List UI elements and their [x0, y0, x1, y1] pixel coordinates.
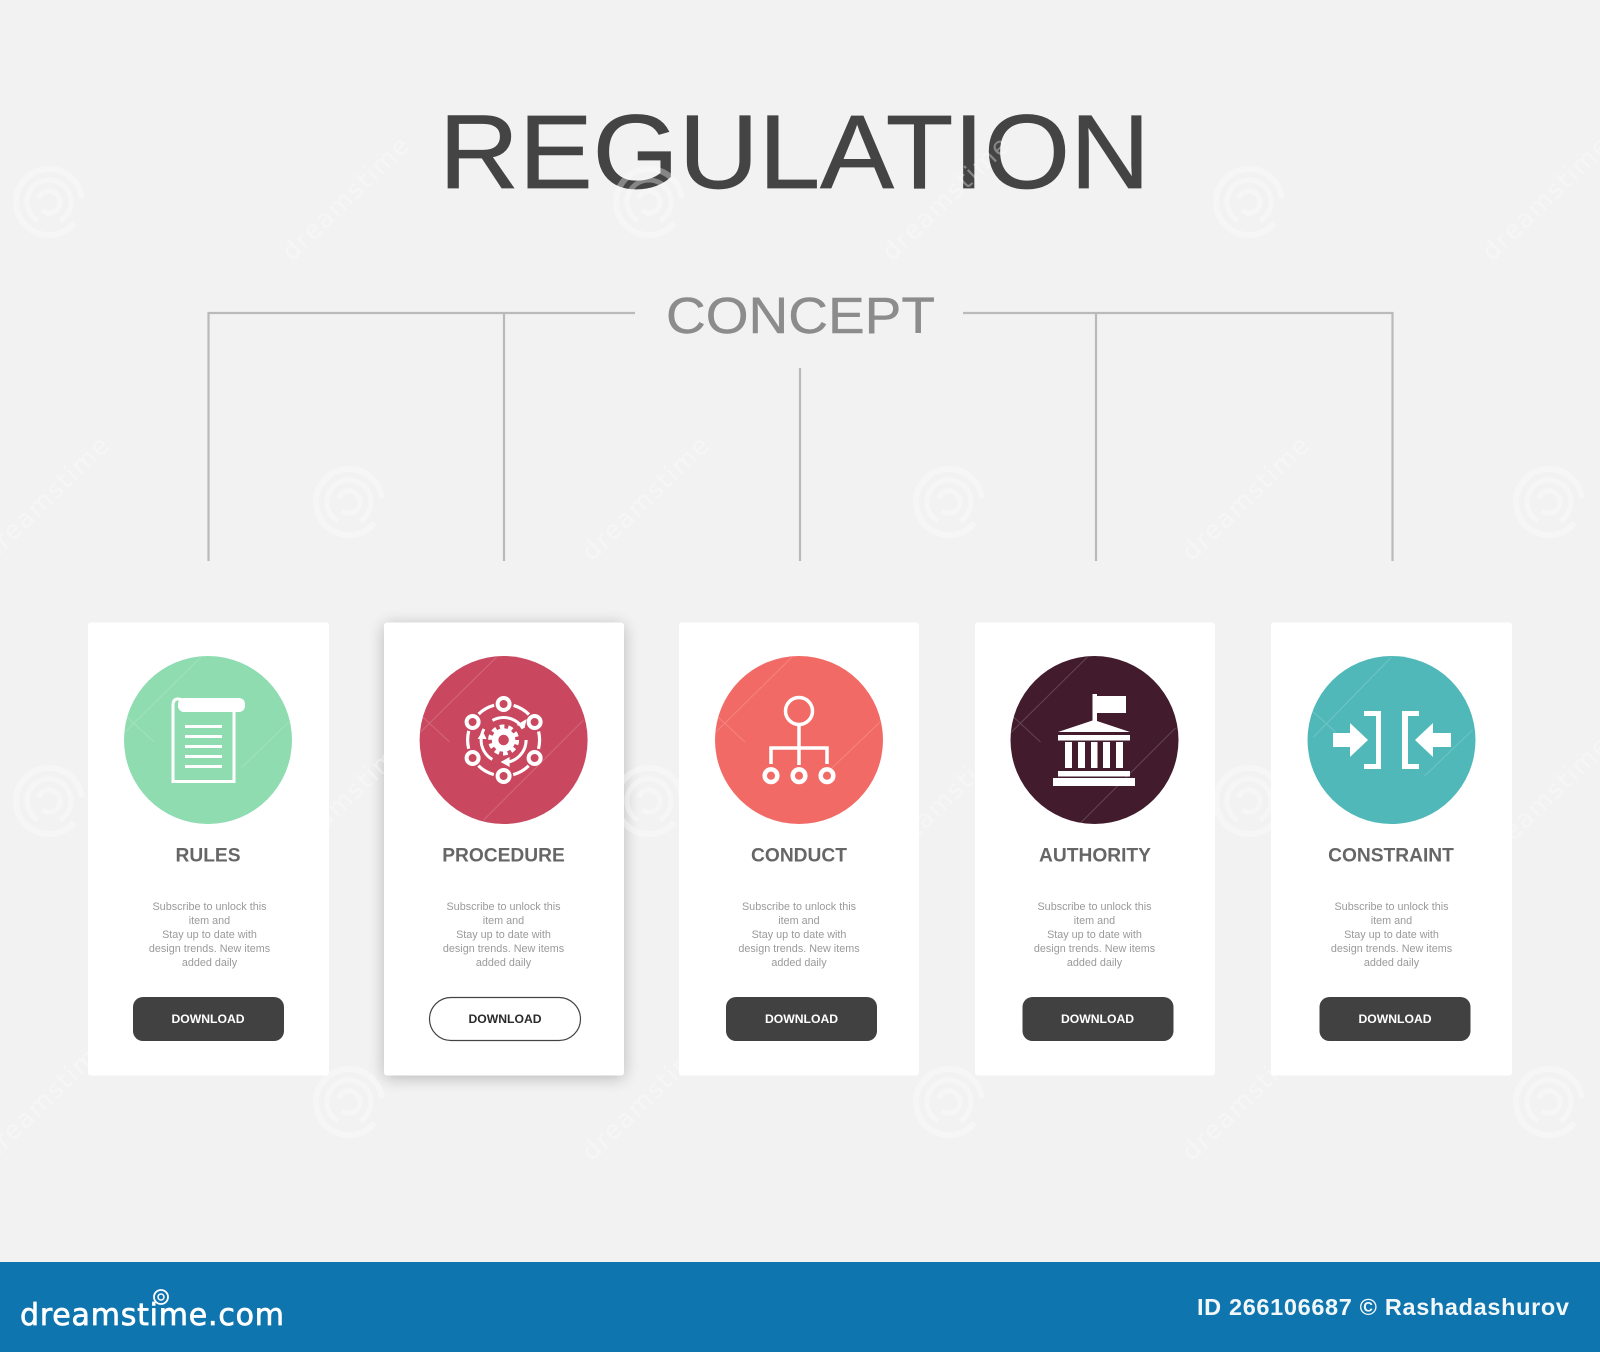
text block: conduct: Subscribe to unlock this [742, 901, 857, 913]
heading: authority: AUTHORITY [1039, 846, 1151, 866]
heading: constraint: CONSTRAINT [1328, 846, 1454, 866]
icon: rules document [124, 656, 292, 824]
text block: rules: Subscribe to unlock this [152, 901, 267, 913]
button: authority download: DOWNLOAD [1061, 1012, 1134, 1026]
text block: rules: design trends. New items [149, 943, 271, 955]
text block: constraint: design trends. New items [1331, 943, 1453, 955]
heading: procedure: PROCEDURE [442, 846, 565, 866]
text block: constraint: Stay up to date with [1344, 929, 1439, 941]
text block: procedure: item and [483, 915, 524, 927]
footer credit: ID 266106687 © Rashadashurov [1197, 1294, 1569, 1320]
watermark overlay: dreamstime [1176, 1031, 1315, 1166]
text block: constraint: Subscribe to unlock this [1334, 901, 1449, 913]
text block: authority: item and [1074, 915, 1115, 927]
text block: procedure [443, 901, 565, 969]
text block: conduct: design trends. New items [738, 943, 860, 955]
text block: conduct: Stay up to date with [752, 929, 846, 941]
panel: rules [88, 622, 329, 1076]
icon: procedure gear network [420, 656, 588, 824]
panel: procedure [384, 622, 624, 1078]
text block: constraint [1331, 901, 1453, 969]
button: rules download [133, 997, 284, 1041]
icon: authority building [1010, 656, 1178, 824]
text block: rules: item and [189, 915, 230, 927]
watermark overlay: dreamstime [276, 131, 415, 266]
connector lines [208, 313, 1392, 561]
button: rules download: DOWNLOAD [171, 1012, 245, 1026]
watermark overlay: dreamstime [576, 1031, 715, 1166]
text block: procedure: Subscribe to unlock this [446, 901, 561, 913]
text block: rules: Stay up to date with [162, 929, 257, 941]
footer logo: dreamstime.com [20, 1298, 284, 1333]
text block: constraint: added daily [1364, 957, 1420, 969]
text block: constraint: item and [1371, 915, 1412, 927]
text block: procedure: Stay up to date with [456, 929, 551, 941]
subtitle: concept: CONCEPT [666, 287, 935, 344]
watermark overlay: dreamstime [276, 731, 415, 866]
icon: constraint arrows and brackets [1308, 656, 1476, 824]
button: authority download [1022, 997, 1174, 1041]
text block: rules [149, 901, 271, 969]
text block: rules: added daily [182, 957, 238, 969]
heading: conduct: CONDUCT [751, 846, 847, 866]
button: procedure download [430, 998, 580, 1040]
text block: conduct: added daily [771, 957, 827, 969]
text block: conduct [738, 901, 860, 969]
watermark overlay: dreamstime [876, 131, 1015, 266]
footer bar [0, 1262, 1600, 1352]
title: REGULATION [439, 94, 1150, 211]
text block: authority: Subscribe to unlock this [1037, 901, 1152, 913]
panel: authority [975, 622, 1215, 1076]
button: conduct download: DOWNLOAD [765, 1012, 838, 1026]
text block: authority: design trends. New items [1034, 943, 1156, 955]
watermark overlay: dreamstime [1176, 431, 1315, 566]
button: constraint download [1320, 997, 1470, 1041]
text block: conduct: item and [778, 915, 820, 927]
icon: conduct hierarchy [715, 656, 883, 824]
button: procedure download: DOWNLOAD [468, 1012, 542, 1026]
button: conduct download [726, 997, 877, 1041]
text block: authority [1034, 901, 1156, 969]
watermark overlay: dreamstime [576, 431, 715, 566]
watermark overlay [0, 131, 1600, 1166]
text block: authority: Stay up to date with [1047, 929, 1142, 941]
text block: authority: added daily [1067, 957, 1123, 969]
watermark overlay: dreamstime [876, 731, 1015, 866]
heading: rules: RULES [175, 846, 241, 866]
text block: procedure: design trends. New items [443, 943, 565, 955]
panel: constraint [1271, 622, 1512, 1076]
text block: procedure: added daily [476, 957, 532, 969]
button: constraint download: DOWNLOAD [1358, 1012, 1432, 1026]
panel: conduct [679, 622, 919, 1076]
